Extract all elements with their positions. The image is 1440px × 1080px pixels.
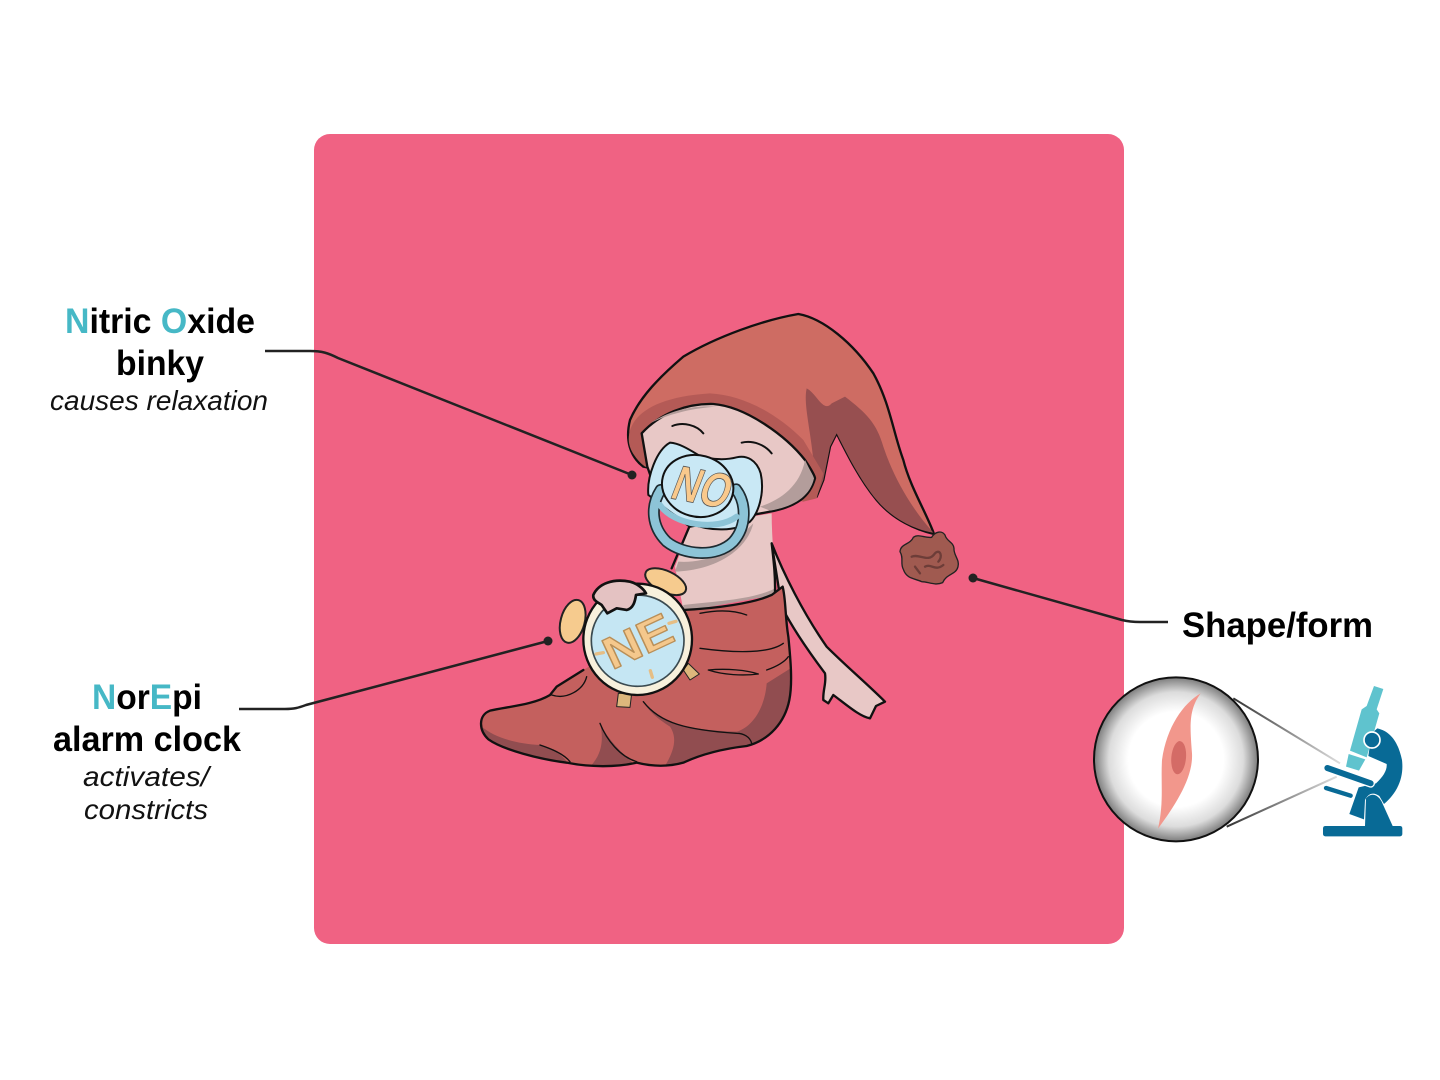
clock face (583, 584, 692, 695)
head (642, 404, 815, 527)
icon: microscope (1323, 686, 1402, 836)
text block: Nitric Oxide binky (50, 302, 268, 416)
text block: Nitric Oxide binky: binky (116, 344, 205, 383)
microscope base (1323, 826, 1402, 836)
leader line: NO (265, 351, 636, 480)
head shadow (650, 406, 814, 511)
microscope view (1094, 677, 1402, 841)
microscope stage (1327, 768, 1371, 783)
pacifier ring (654, 489, 744, 553)
leader line: NE (239, 636, 552, 709)
microscope stage bar (1327, 768, 1371, 783)
top bell (641, 563, 690, 601)
clock feet (617, 663, 699, 707)
clock tick marks (596, 621, 676, 677)
microscope arm (1349, 728, 1402, 819)
blanket folds (540, 611, 788, 762)
left bell (555, 597, 590, 646)
clock dial (591, 595, 684, 686)
hat tail shadow (806, 388, 933, 533)
text: Shape/form: Shape/form (1182, 606, 1373, 645)
text block: NorEpi alarm clock: alarm clock (53, 720, 242, 759)
neck outline (672, 527, 775, 592)
hat brim shadow (629, 393, 823, 502)
pacifier (648, 443, 762, 553)
smooth muscle cell (1158, 693, 1201, 829)
magnified lens with cell (1094, 677, 1258, 841)
alarm clock (555, 563, 699, 707)
blanket (477, 587, 793, 773)
text block: Nitric Oxide binky: Nitric Oxide (65, 302, 255, 341)
magnification beams (1227, 698, 1340, 827)
pompom folds (912, 552, 943, 573)
microscope tube (1350, 686, 1383, 757)
NO label: NO (665, 456, 741, 519)
pacifier ring fill (654, 489, 744, 553)
hat tail (628, 314, 934, 534)
blanket outline (481, 587, 791, 766)
clock bell stems (577, 583, 667, 625)
leader line: shape (968, 574, 1168, 622)
pacifier lower band (660, 505, 737, 525)
nucleus (1170, 740, 1187, 775)
text block: NorEpi alarm clock: constricts (84, 794, 208, 825)
pacifier shield (648, 443, 762, 529)
blanket shadow (646, 669, 790, 764)
neck shadow (675, 523, 775, 612)
microscope pillar (1365, 795, 1393, 826)
text block: Nitric Oxide binky: causes relaxation (50, 385, 268, 416)
hand (593, 581, 646, 613)
pacifier button (655, 447, 740, 525)
body (675, 513, 775, 610)
panel: pink background (314, 134, 1124, 944)
text block: NorEpi alarm clock: activates/ (83, 761, 212, 792)
toe shadow (482, 726, 632, 765)
arm (772, 543, 885, 718)
microscope lower stage (1326, 788, 1351, 796)
eyes (672, 424, 772, 453)
pompom (900, 532, 958, 584)
text block: NorEpi alarm clock: NorEpi (92, 678, 202, 717)
text block: NorEpi alarm clock (53, 678, 242, 825)
microscope nozzle (1346, 754, 1365, 771)
NE label: NE (595, 603, 681, 679)
illustration: baby character (477, 314, 958, 773)
microscope knob (1364, 732, 1380, 748)
